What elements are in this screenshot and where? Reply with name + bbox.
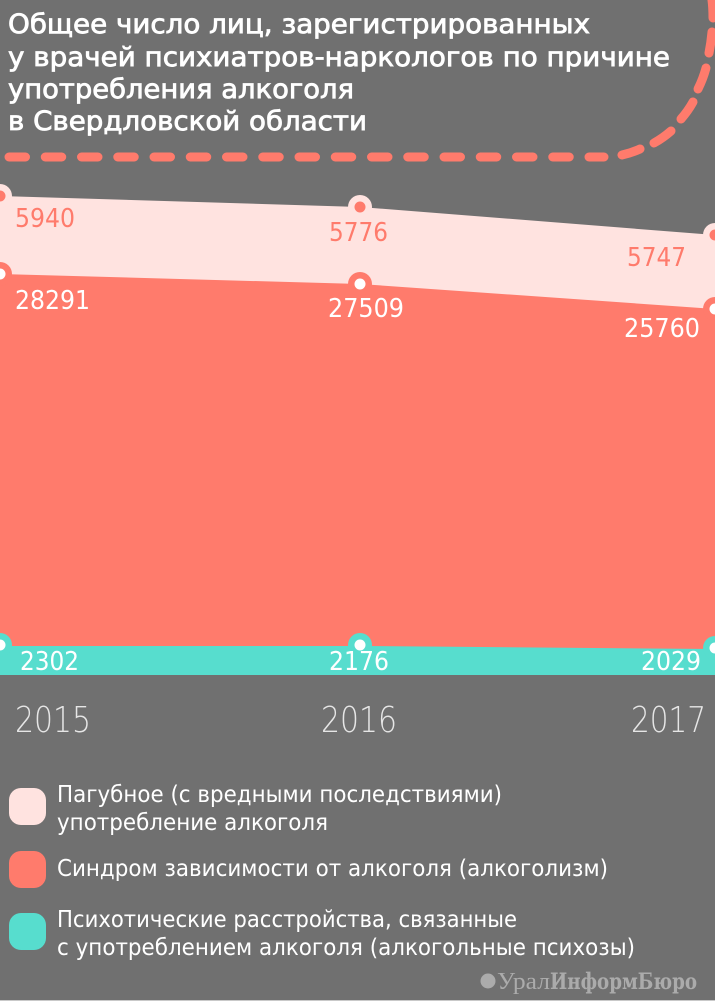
dashed decorative arrow line <box>9 0 713 157</box>
legend item: psychoses <box>9 905 635 961</box>
values: psychoses <box>20 647 701 677</box>
area: dependence syndrome <box>0 262 715 660</box>
values: dependence syndrome: 28291 <box>15 286 90 316</box>
legend <box>9 780 635 961</box>
legend item: dependence syndrome: Синдром зависимости от алкоголя (алкоголизм) <box>57 854 608 882</box>
legend item: psychoses: с употреблением алкоголя (алкогольные психозы) <box>57 933 635 961</box>
area chart <box>0 184 715 677</box>
watermark logo: Урал <box>497 969 550 995</box>
area: harmful use <box>0 184 715 320</box>
legend item: harmful use: употребление алкоголя <box>57 808 328 836</box>
values: harmful use: 5747 <box>627 243 686 273</box>
values: dependence syndrome: 27509 <box>328 294 404 324</box>
title: Общее число лиц, зарегистрированных <box>8 9 590 40</box>
values: harmful use: 5776 <box>329 218 388 248</box>
title: употребления алкоголя <box>8 74 354 105</box>
values: psychoses: 2302 <box>20 647 79 677</box>
area: psychoses <box>0 633 715 675</box>
title: у врачей психиатров-наркологов по причине <box>8 42 670 73</box>
values: dependence syndrome <box>15 286 700 344</box>
legend item: psychoses: Психотические расстройства, связанные <box>57 905 517 933</box>
values: harmful use: 5940 <box>15 204 75 234</box>
watermark logo <box>480 969 697 995</box>
year axis <box>15 700 706 741</box>
values: dependence syndrome: 25760 <box>624 314 700 344</box>
year axis: 2015 <box>15 700 91 741</box>
title: в Свердловской области <box>8 106 367 137</box>
legend item: dependence syndrome <box>9 851 608 888</box>
legend item: harmful use: Пагубное (с вредными последствиями) <box>57 780 502 808</box>
title <box>8 9 670 137</box>
legend item: harmful use <box>9 780 502 836</box>
values: psychoses: 2029 <box>641 647 701 677</box>
values: psychoses: 2176 <box>329 647 389 677</box>
year axis: 2016 <box>321 700 397 741</box>
values: harmful use <box>15 204 686 273</box>
